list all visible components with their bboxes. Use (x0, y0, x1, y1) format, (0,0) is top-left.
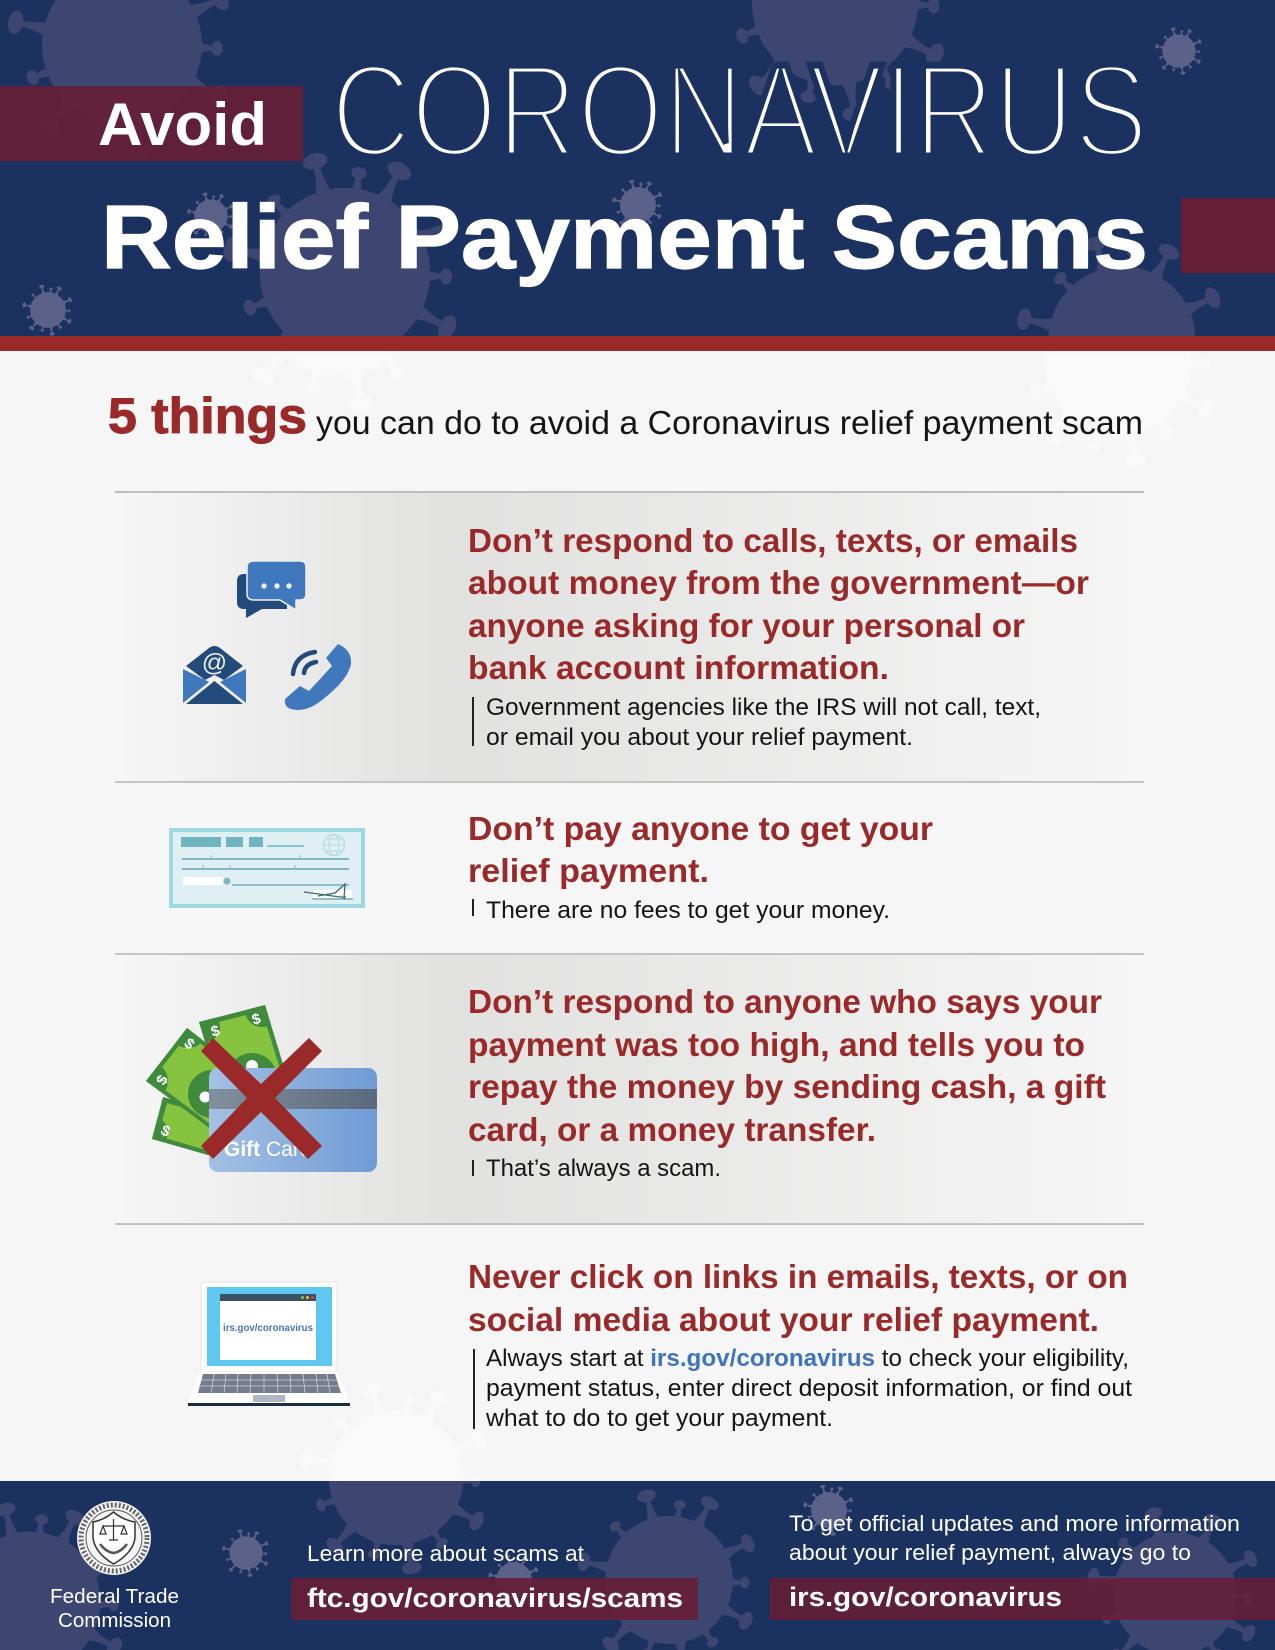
cash bills: $ (250, 1010, 263, 1029)
irs link callout: about your relief payment, always go to (789, 1540, 1191, 1565)
tip 1 detail (472, 694, 1041, 751)
irs link callout: To get official updates and more information (789, 1511, 1240, 1536)
ftc seal (77, 1501, 151, 1575)
decorative red block (1181, 198, 1275, 273)
tip 1 heading: Don’t respond to calls, texts, or emails (468, 523, 1078, 560)
ftc link callout: Learn more about scams at (307, 1541, 584, 1566)
icon: check (171, 830, 363, 906)
irs link callout: irs.gov/coronavirus (789, 1582, 1062, 1612)
icon: chat bubbles (237, 561, 306, 618)
row backgrounds (115, 491, 1144, 1225)
tip 1 detail: Government agencies like the IRS will not call, text, (486, 694, 1041, 721)
tip 4 detail: what to do to get your payment. (485, 1405, 833, 1432)
avoid tag (0, 86, 303, 161)
panel: tip 1 (183, 523, 1089, 751)
tip 2 heading: Don’t pay anyone to get your (468, 811, 933, 848)
panel: header banner (0, 0, 1275, 351)
icon: envelope: @ (202, 649, 227, 677)
tip 3 heading: Don’t respond to anyone who says your (468, 984, 1102, 1021)
ftc name: Commission (58, 1610, 171, 1632)
title: relief payment scams: Relief Payment Scams (101, 188, 1148, 288)
tip 4 heading (468, 1259, 1128, 1339)
tip 2 heading: relief payment. (468, 853, 709, 890)
icon: telephone (285, 644, 351, 710)
tip 3 heading: card, or a money transfer. (468, 1112, 876, 1149)
panel: footer (0, 1481, 1275, 1650)
ftc link callout (291, 1541, 698, 1620)
tip 1 heading: bank account information. (468, 650, 889, 687)
tip 1 heading (468, 523, 1089, 687)
ftc name (50, 1586, 179, 1632)
heading: 5 things (108, 388, 1143, 444)
tip 1 heading: about money from the government—or (468, 565, 1089, 602)
heading: 5 things: 5 things (108, 388, 307, 444)
icon: envelope (183, 646, 246, 704)
cash bills: $ (158, 1122, 173, 1141)
tip 1 heading: anyone asking for your personal or (468, 608, 1025, 645)
ftc name: Federal Trade (50, 1586, 179, 1608)
icon: laptop (188, 1282, 350, 1406)
tip 4 heading: Never click on links in emails, texts, or on (468, 1259, 1128, 1296)
panel: tip 4 (188, 1259, 1132, 1432)
cash bills: $ (180, 1035, 198, 1054)
tip 4 heading: social media about your relief payment. (468, 1302, 1099, 1339)
tip 4 detail (473, 1345, 1132, 1432)
cash bills: $ (153, 1072, 172, 1088)
tip 4 detail: payment status, enter direct deposit information, or find out (486, 1375, 1132, 1402)
tip 2 detail: There are no fees to get your money. (486, 897, 890, 924)
panel: tip 2 (171, 811, 933, 924)
icon: laptop: irs.gov/coronavirus (223, 1322, 313, 1334)
red x (201, 1038, 322, 1159)
heading: 5 things: you can do to avoid a Coronavirus relief payment scam (316, 404, 1143, 441)
tip 2 heading (468, 811, 933, 890)
ftc link callout: ftc.gov/coronavirus/scams (307, 1583, 683, 1613)
title: coronavirus: CORONAVIRUS (331, 37, 1148, 184)
tip 3 heading: payment was too high, and tells you to (468, 1027, 1085, 1064)
tip 1 detail: or email you about your relief payment. (486, 724, 913, 751)
tip 3 detail: That’s always a scam. (486, 1155, 721, 1182)
cash bills (146, 1005, 283, 1156)
panel: tip 3 (128, 984, 1106, 1182)
gift card (209, 1068, 377, 1172)
tip 3 heading (468, 984, 1106, 1149)
tip 3 heading: repay the money by sending cash, a gift (468, 1069, 1106, 1106)
gift card: Gift Card (224, 1138, 312, 1161)
irs link callout (770, 1511, 1275, 1620)
body faint virus pattern (216, 167, 1220, 1576)
icon: cash and gift card crossed out (146, 1005, 377, 1172)
cash bills: $ (209, 1022, 222, 1041)
tip 4 detail: Always start at irs.gov/coronavirus to check your eligibility, (486, 1345, 1129, 1372)
avoid tag: Avoid (98, 91, 267, 158)
